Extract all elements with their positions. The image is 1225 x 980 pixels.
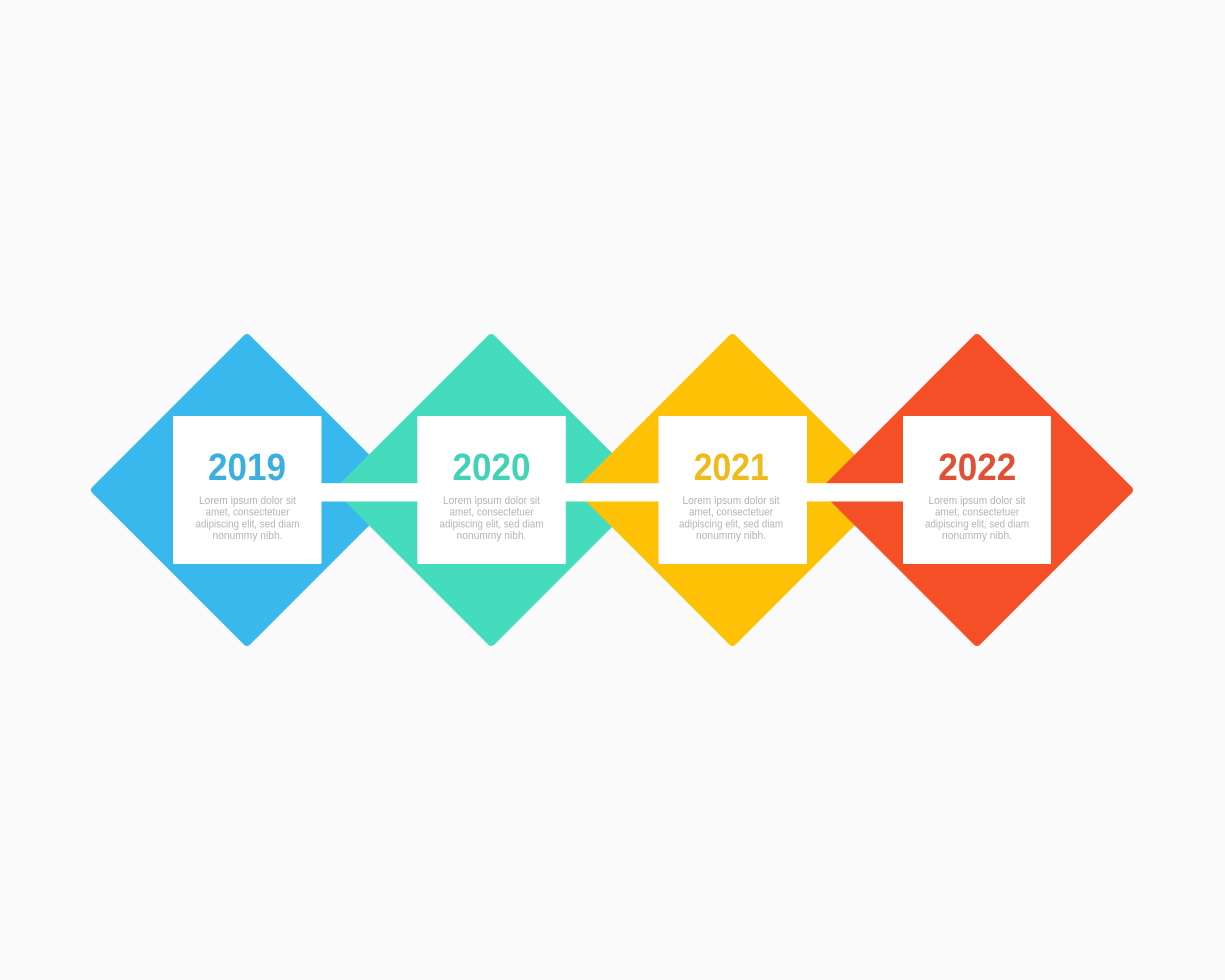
description: 2022: [925, 495, 1029, 542]
card: 2022: [903, 416, 1051, 564]
description: 2019: [196, 495, 300, 542]
description: 2021: nonummy nibh.: [696, 530, 766, 542]
description: 2022: amet, consectetuer: [935, 507, 1019, 519]
description: 2021: Lorem ipsum dolor sit: [682, 495, 780, 507]
description: 2021: amet, consectetuer: [689, 507, 773, 519]
description: 2020: [440, 495, 544, 542]
diamond: 2021 yellow: [575, 332, 890, 648]
description: 2020: adipiscing elit, sed diam: [440, 518, 544, 530]
description: 2022: Lorem ipsum dolor sit: [928, 495, 1026, 507]
description: 2019: Lorem ipsum dolor sit: [199, 495, 296, 507]
description: 2021: adipiscing elit, sed diam: [679, 518, 783, 530]
card: 2020: [417, 416, 566, 564]
description: 2020: amet, consectetuer: [450, 507, 534, 519]
year: 2022: 2022: [938, 447, 1016, 489]
description: 2019: nonummy nibh.: [212, 530, 282, 542]
card: 2021: [658, 416, 807, 564]
diamond: 2019 blue: [89, 332, 405, 648]
description: 2020: Lorem ipsum dolor sit: [443, 495, 540, 507]
description: 2021: [679, 495, 783, 542]
year: 2020: 2020: [452, 447, 530, 489]
card: 2019: [173, 416, 322, 564]
year: 2021: 2021: [694, 447, 769, 489]
year: 2019: 2019: [208, 447, 286, 489]
diamond: 2020 teal: [334, 332, 649, 648]
description: 2019: adipiscing elit, sed diam: [196, 518, 300, 530]
description: 2019: amet, consectetuer: [206, 507, 290, 519]
diamond: 2022 red: [819, 332, 1135, 648]
description: 2022: adipiscing elit, sed diam: [925, 518, 1029, 530]
description: 2022: nonummy nibh.: [942, 530, 1012, 542]
connector bars: [320, 483, 905, 502]
description: 2020: nonummy nibh.: [456, 530, 526, 542]
